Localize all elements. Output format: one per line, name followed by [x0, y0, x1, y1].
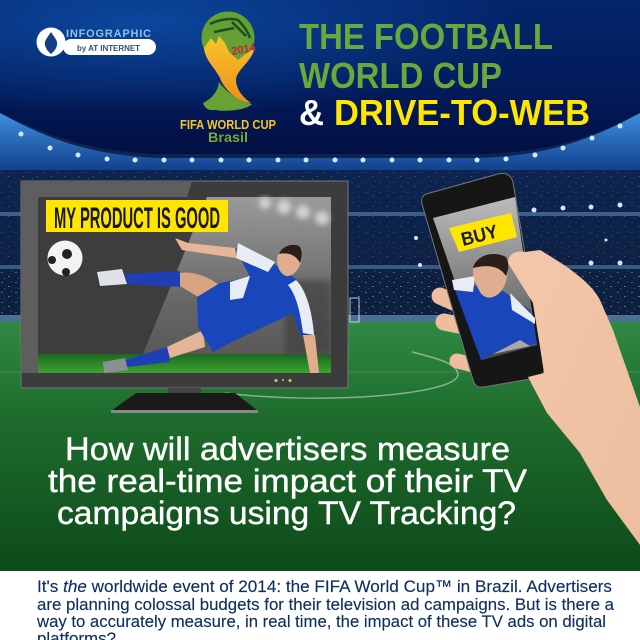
question heading: the real-time impact of their TV [48, 463, 528, 499]
title: WORLD CUP [299, 55, 502, 96]
logo: FIFA World Cup 2014 Brasil: FIFA WORLD CUP [180, 118, 276, 132]
title: & [299, 92, 324, 133]
tv screen [38, 197, 331, 373]
intro text panel: It's the worldwide event of 2014: the FIFA World Cup™ in Brazil. Advertisers [37, 577, 612, 596]
logo: FIFA World Cup 2014 Brasil [180, 12, 276, 145]
logo: FIFA World Cup 2014 Brasil: 2014 [230, 42, 257, 58]
yellow banner: buy: BUY [459, 221, 500, 251]
intro text panel: way to accurately measure, in real time, the impact of these TV ads on digital [36, 612, 606, 631]
football [48, 240, 82, 276]
tv stand [111, 388, 258, 413]
smartphone [422, 173, 544, 387]
question heading: campaigns using TV Tracking? [57, 495, 516, 531]
hand holding phone [422, 173, 640, 545]
intro text panel [0, 571, 640, 640]
title: DRIVE-TO-WEB [334, 92, 590, 133]
intro text panel: are planning colossal budgets for their television ad campaigns. But is there a [37, 595, 615, 614]
television [21, 181, 348, 413]
question heading [48, 431, 528, 531]
footballer [97, 238, 319, 373]
tv indicator lights [274, 379, 292, 382]
title: THE FOOTBALL [299, 16, 553, 57]
yellow banner: my product is good [46, 200, 228, 235]
header sky with curved stadium roof [0, 0, 640, 267]
yellow banner: buy [449, 213, 517, 252]
title [299, 16, 590, 133]
logo: infographic by AT Internet [36, 28, 156, 56]
logo: infographic by AT Internet: INFOGRAPHIC [66, 28, 151, 40]
logo: infographic by AT Internet: by AT INTERNET [77, 44, 140, 53]
question heading: How will advertisers measure [65, 431, 510, 467]
yellow banner: my product is good: MY PRODUCT IS GOOD [54, 202, 220, 235]
footballer on phone [452, 254, 537, 360]
logo: FIFA World Cup 2014 Brasil: Brasil [208, 129, 248, 145]
